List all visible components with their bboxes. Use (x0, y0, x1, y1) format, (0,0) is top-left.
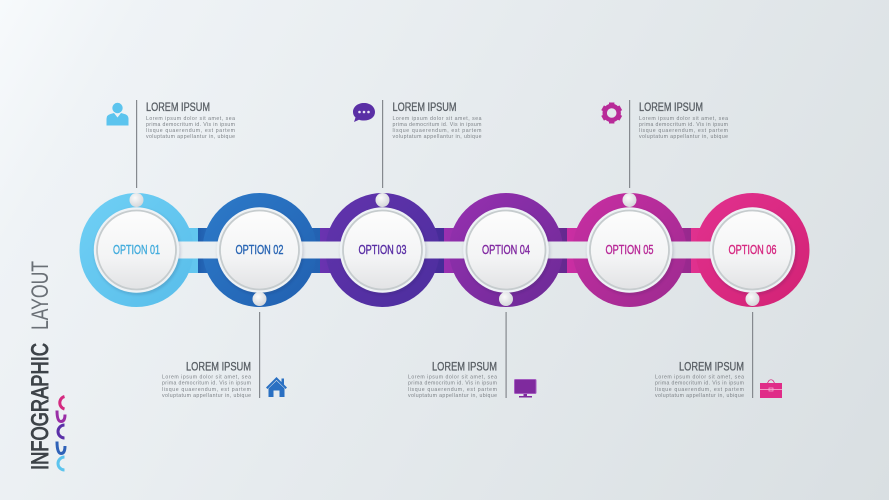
text block 02: voluptatum appellantur in, ubique (162, 393, 251, 399)
text block 02 (162, 360, 251, 399)
text block 04: voluptatum appellantur in, ubique (408, 393, 497, 399)
connector bars (136, 228, 752, 273)
text block 05: prima democritum id. Vis in ipsum (639, 122, 728, 128)
callout line and knob 03 (376, 100, 390, 207)
option 03 disc: OPTION 03 (358, 243, 406, 257)
text block 01: prima democritum id. Vis in ipsum (146, 122, 235, 128)
text block 04 (408, 360, 497, 399)
text block 06: Lorem ipsum dolor sit amet, sea (655, 374, 744, 380)
icon: monitor (514, 380, 536, 398)
option 03 disc (340, 207, 425, 293)
title wave ornament (57, 396, 65, 470)
text block 01: LOREM IPSUM (146, 100, 210, 114)
text block 05: lisque quaerendum, est partem (639, 128, 728, 134)
text block 03: prima democritum id. Vis in ipsum (392, 122, 482, 128)
text block 06: LOREM IPSUM (679, 360, 744, 374)
icon: briefcase (760, 380, 782, 398)
icon: house (266, 377, 287, 397)
option 06 disc: OPTION 06 (728, 243, 776, 257)
option 02 disc: OPTION 02 (236, 243, 284, 257)
option 02 disc (217, 207, 302, 293)
text block 05: LOREM IPSUM (639, 100, 703, 114)
text block 06: lisque quaerendum, est partem (655, 387, 744, 393)
text block 01: Lorem ipsum dolor sit amet, sea (146, 116, 235, 122)
text block 04: lisque quaerendum, est partem (408, 387, 497, 393)
option 01 disc: OPTION 01 (113, 243, 160, 257)
icon: speech bubble (353, 103, 375, 122)
text block 03: voluptatum appellantur in, ubique (392, 134, 482, 140)
callout line and knob 06 (746, 292, 760, 398)
option 04 disc (463, 207, 549, 293)
text block 05 (639, 100, 728, 140)
option 05 disc (587, 207, 672, 293)
text block 06 (655, 360, 744, 399)
text block 03: lisque quaerendum, est partem (392, 128, 482, 134)
icon: gear (601, 102, 622, 124)
center light band (136, 242, 752, 258)
callout line and knob 02 (252, 292, 266, 398)
text block 02: lisque quaerendum, est partem (162, 387, 251, 393)
text block 05: Lorem ipsum dolor sit amet, sea (639, 116, 728, 122)
vertical title: INFOGRAPHIC (27, 343, 54, 470)
vertical title: LAYOUT (27, 261, 54, 330)
text block 02: LOREM IPSUM (186, 360, 251, 374)
text block 04: Lorem ipsum dolor sit amet, sea (408, 374, 497, 380)
text block 06: prima democritum id. Vis in ipsum (655, 381, 744, 387)
option 05 disc: OPTION 05 (606, 243, 654, 257)
text block 01 (146, 100, 235, 140)
option 01 disc (94, 207, 179, 293)
option 04 disc: OPTION 04 (482, 243, 530, 257)
text block 03: Lorem ipsum dolor sit amet, sea (392, 116, 482, 122)
text block 02: Lorem ipsum dolor sit amet, sea (162, 374, 251, 380)
text block 01: voluptatum appellantur in, ubique (146, 134, 235, 140)
text block 01: lisque quaerendum, est partem (146, 128, 235, 134)
callout line and knob 01 (130, 100, 144, 207)
text block 06: voluptatum appellantur in, ubique (655, 393, 744, 399)
text block 03: LOREM IPSUM (392, 100, 456, 114)
icon: person (106, 103, 128, 126)
text block 04: LOREM IPSUM (432, 360, 497, 374)
text block 05: voluptatum appellantur in, ubique (639, 134, 728, 140)
colored rings (80, 193, 810, 307)
text block 03 (392, 100, 482, 140)
callout line and knob 05 (622, 100, 636, 207)
text block 02: prima democritum id. Vis in ipsum (162, 381, 251, 387)
option 06 disc (710, 207, 795, 293)
text block 04: prima democritum id. Vis in ipsum (408, 381, 497, 387)
callout line and knob 04 (499, 292, 513, 398)
